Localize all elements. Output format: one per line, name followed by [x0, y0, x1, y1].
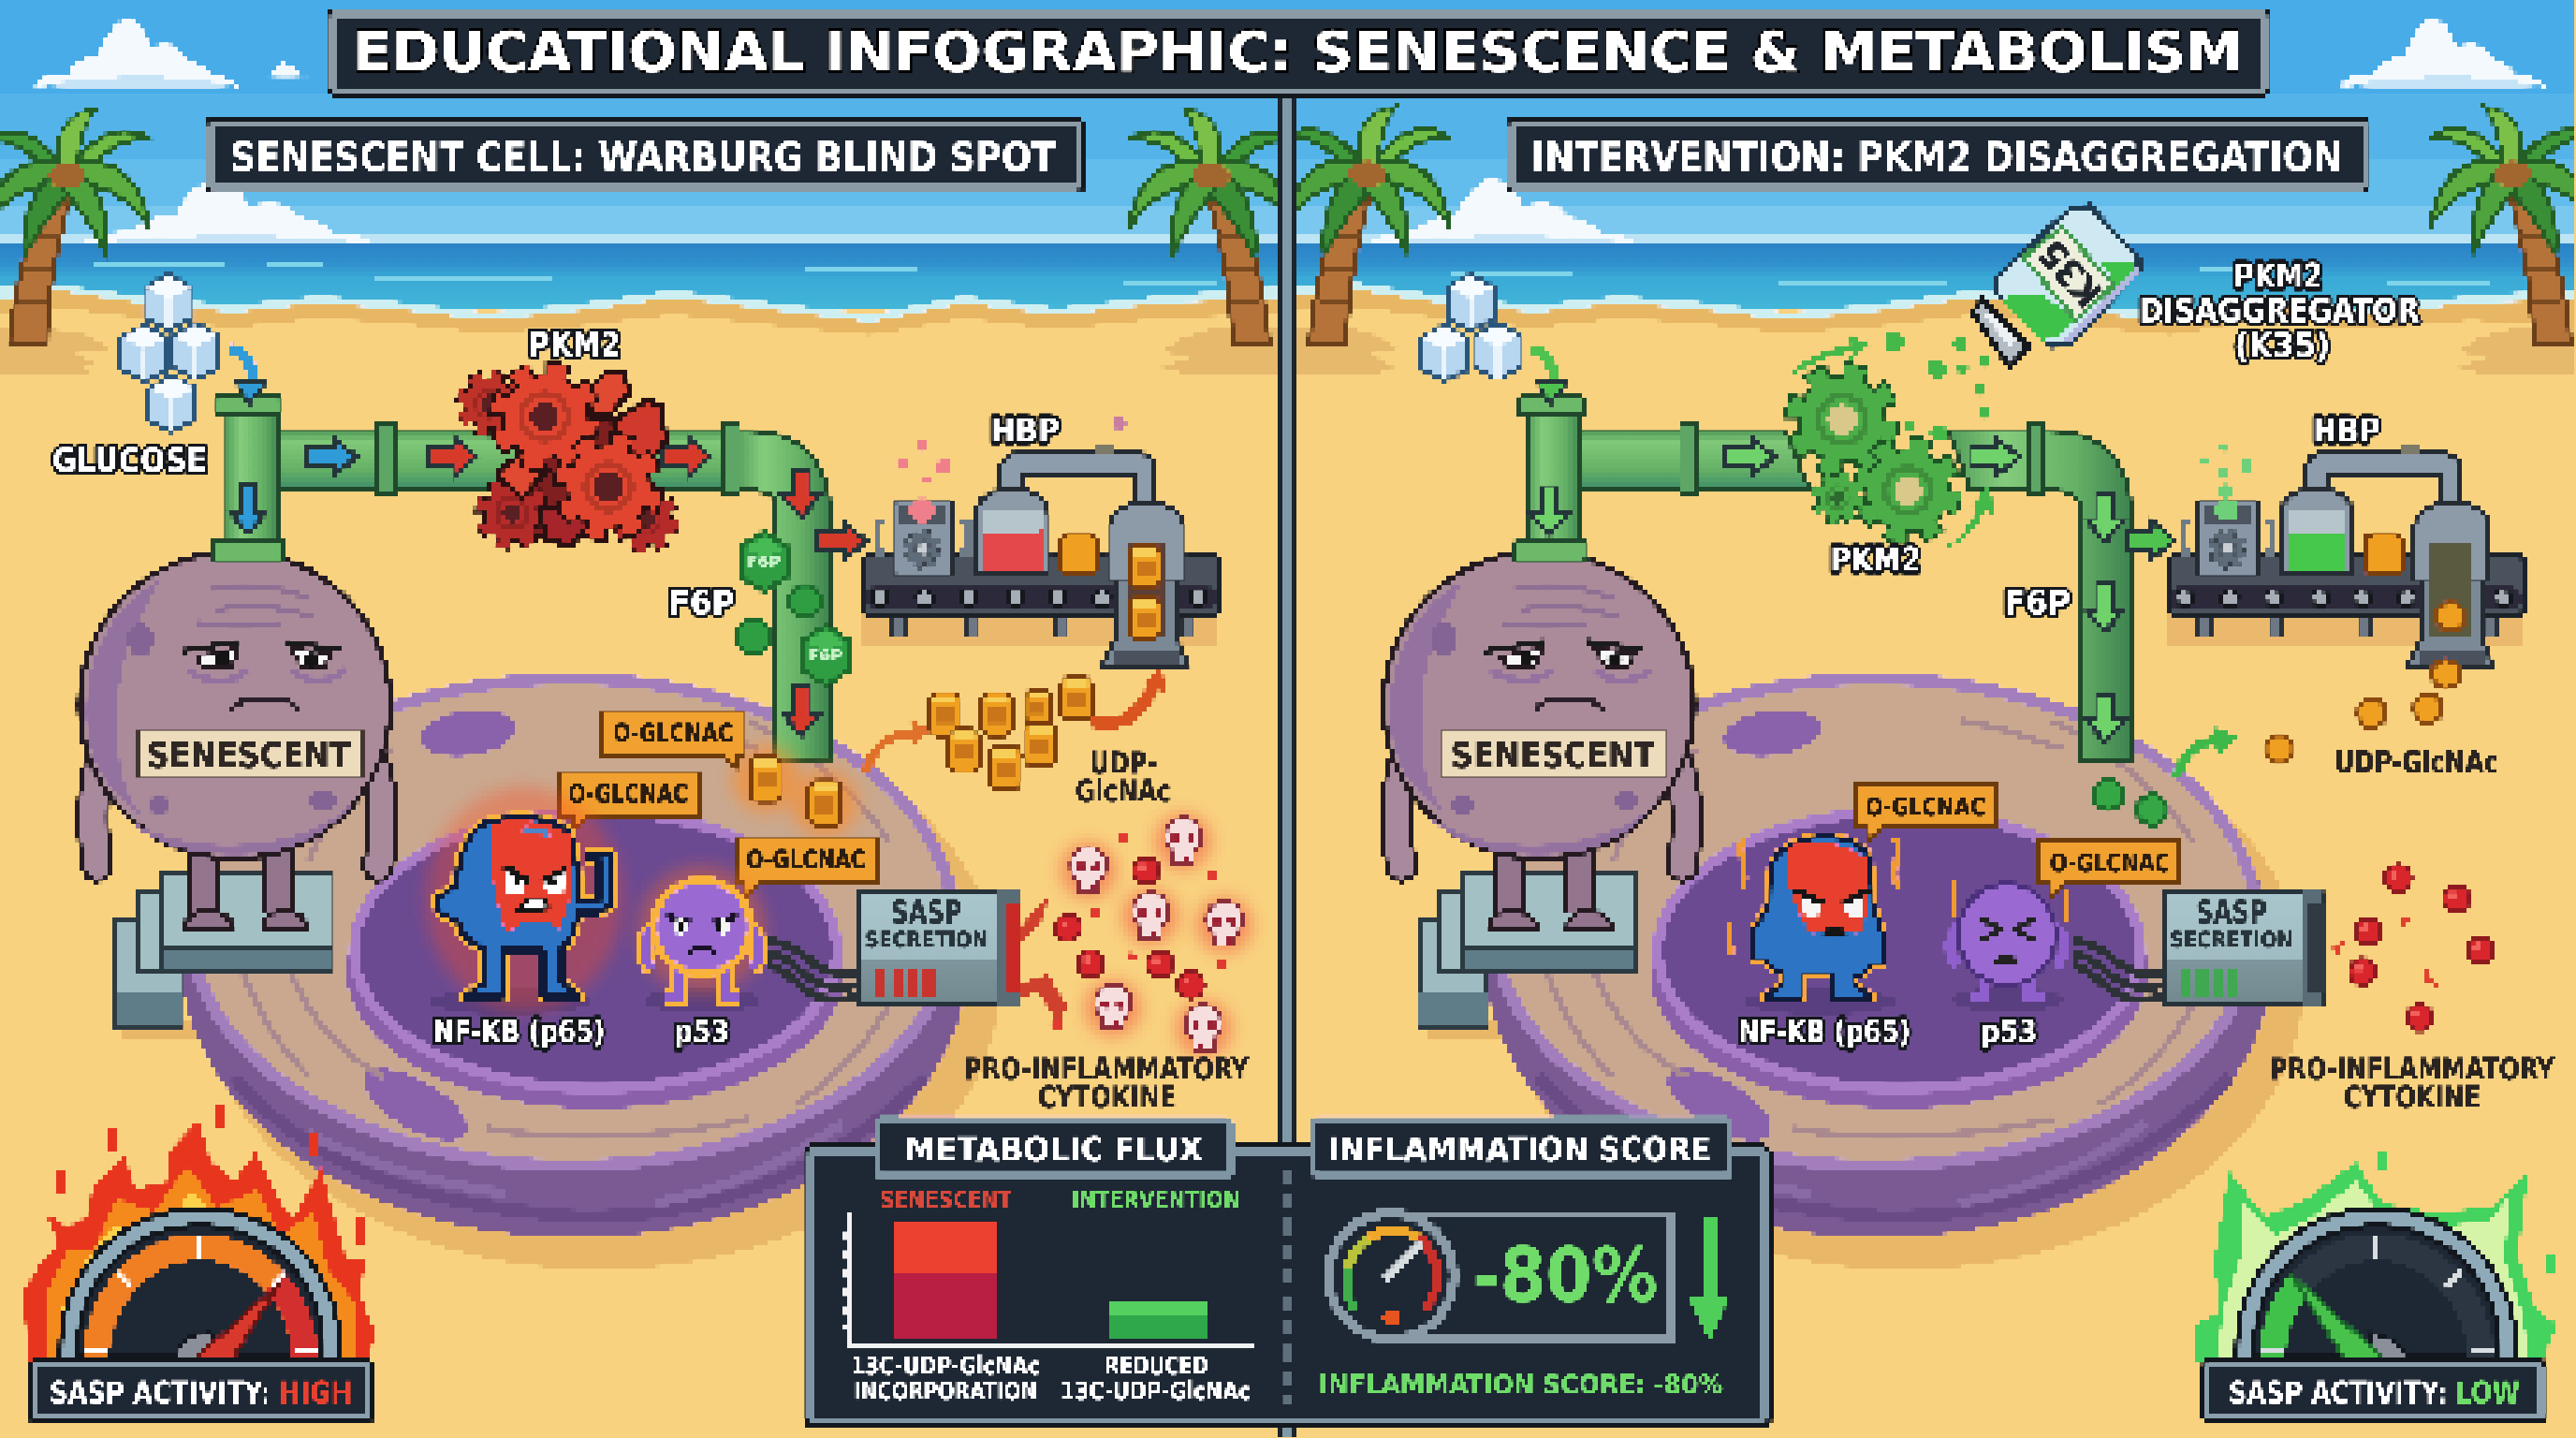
- outline: [437, 817, 611, 997]
- inflammation readout: [1328, 1213, 1730, 1341]
- furnace door: [2431, 543, 2470, 637]
- chart label left: 13C-UDP-GlcNAc: [851, 1352, 1040, 1381]
- cytokines left: [1020, 814, 1252, 1057]
- subtitle banner right: [1508, 120, 2368, 191]
- label: PKM2: PKM2: [529, 326, 621, 364]
- label: PKM2 disaggregator: DISAGGREGATOR: [2139, 292, 2420, 330]
- callout text 3: O-GLCNAC: [746, 845, 866, 874]
- palm tree left outer: [0, 109, 152, 345]
- label: senescent left: SENESCENT: [147, 735, 351, 776]
- background: sky: [0, 0, 2576, 247]
- bar chart: [841, 1214, 1256, 1344]
- tab title: metabolic flux: METABOLIC FLUX: [905, 1131, 1203, 1169]
- callouts right: [1855, 785, 2179, 897]
- arrow: furnace to jars: [1090, 679, 1156, 723]
- dial rim: [69, 1217, 331, 1363]
- dial band right: [2272, 1247, 2481, 1363]
- right gauge: SASP activity low: [2196, 1150, 2557, 1419]
- pipe right: [1515, 397, 2130, 762]
- label: SASP secretion left: SECRETION: [865, 927, 988, 953]
- dial right: [2246, 1217, 2508, 1363]
- palm tree left inner: [1127, 109, 1295, 345]
- label: SASP activity low: SASP ACTIVITY: LOW: [2229, 1374, 2520, 1411]
- chart label left: INCORPORATION: [854, 1377, 1037, 1406]
- arrow head: [1142, 667, 1168, 695]
- label: PKM2 right: PKM2: [1830, 541, 1921, 580]
- character: p53 right: [1950, 880, 2067, 1012]
- label: SASP activity high: SASP ACTIVITY: HIGH: [50, 1374, 352, 1411]
- label: HBP right: HBP: [2313, 412, 2380, 450]
- SASP secretion left: [858, 891, 1020, 1005]
- background: clouds: [33, 19, 2545, 246]
- label: NF-KB right: NF-KB (p65): [1738, 1013, 1910, 1049]
- green liquid: [2287, 530, 2347, 569]
- left HBP machine: [863, 417, 1220, 668]
- callout text 2: O-GLCNAC: [568, 780, 688, 809]
- label: glucose: GLUCOSE: [52, 442, 207, 480]
- dial ticks right: [2259, 1234, 2495, 1350]
- F6P molecules: [737, 532, 849, 685]
- center divider: [1280, 84, 1297, 1438]
- label: SASP secretion right: SECRETION: [2170, 927, 2293, 953]
- chart legend: intervention: INTERVENTION: [1072, 1186, 1240, 1213]
- palm shadows: [0, 330, 2576, 374]
- F6P tag 1: F6P: [747, 553, 781, 572]
- label: PKM2 disaggregator: PKM2: [2233, 257, 2323, 296]
- smoke: [896, 441, 951, 522]
- cell left: [80, 551, 1000, 1269]
- F6P tag 2: F6P: [809, 647, 842, 666]
- body silhouette: [437, 817, 611, 997]
- bottle label K35: K35: [2031, 231, 2112, 315]
- icon: aggregated PKM2 gears: [462, 371, 673, 547]
- label: p53 left: p53: [674, 1013, 729, 1049]
- right HBP machine: [2168, 443, 2525, 763]
- character: NF-KB right: [1728, 837, 1898, 1015]
- label: SASP secretion left: SASP: [891, 894, 962, 932]
- label: SASP secretion right: SASP: [2196, 894, 2267, 932]
- left gauge: SASP activity high: [23, 1107, 374, 1419]
- chart label right: REDUCED: [1105, 1352, 1208, 1381]
- tab: inflammation score: [1313, 1120, 1730, 1176]
- icon: glucose cubes right: [1421, 274, 1521, 381]
- arrows in pipe: [229, 348, 867, 736]
- tab: metabolic flux: [877, 1120, 1231, 1176]
- icon: separated PKM2 gears: [1796, 374, 1952, 535]
- tab title: inflammation score: INFLAMMATION SCORE: [1328, 1131, 1711, 1169]
- dial: [69, 1217, 331, 1363]
- green aura: [2196, 1150, 2557, 1363]
- furnace door: [1126, 543, 1165, 637]
- pipe: [212, 397, 829, 762]
- needle: [174, 1283, 281, 1363]
- readout value: -80%: [1472, 1232, 1658, 1319]
- label plate: senescent left: [138, 730, 362, 777]
- green F6P dots: [2093, 780, 2167, 825]
- flames: [23, 1107, 374, 1363]
- label: UDP-GlcNAc: UDP-: [1090, 745, 1157, 781]
- arrow: jars into cell: [866, 719, 931, 772]
- palm tree right inner: [1283, 107, 1452, 343]
- chart legend: senescent: SENESCENT: [880, 1186, 1012, 1213]
- subtitle right: INTERVENTION: PKM2 DISAGGREGATION: [1531, 134, 2343, 182]
- panel: metabolic flux and inflammation score: [808, 1120, 1767, 1423]
- label: UDP-GlcNAc right: UDP-GlcNAc: [2334, 744, 2498, 780]
- label: cytokine left: PRO-INFLAMMATORY: [964, 1051, 1250, 1087]
- label: cytokine left: CYTOKINE: [1038, 1079, 1177, 1115]
- character: p53 left: [638, 866, 766, 1013]
- label: F6P: F6P: [668, 584, 735, 623]
- dashed separator: [1284, 1168, 1292, 1402]
- callout text right 1: O-GLCNAC: [1866, 793, 1985, 822]
- icon: glucose cubes: [121, 274, 219, 432]
- glowing jars: [732, 745, 858, 837]
- readout caption: INFLAMMATION SCORE: -80%: [1319, 1369, 1723, 1400]
- dial rim right: [2246, 1217, 2508, 1363]
- SASP secretion right: [2163, 891, 2324, 1005]
- green smoke: [2200, 443, 2253, 521]
- label panel right: [2206, 1363, 2543, 1419]
- chart label right: 13C-UDP-GlcNAc: [1061, 1377, 1251, 1406]
- label: senescent right: SENESCENT: [1451, 735, 1655, 776]
- label: F6P right: F6P: [2004, 584, 2071, 623]
- label: UDP-GlcNAc: GlcNAc: [1076, 773, 1171, 809]
- subtitle left: SENESCENT CELL: WARBURG BLIND SPOT: [230, 134, 1056, 182]
- character: NF-KB left: [426, 786, 622, 1015]
- disaggregator particles: [1789, 331, 1994, 550]
- right pipeline: [1421, 206, 2174, 762]
- wires right: [2072, 941, 2163, 1000]
- label: cytokine right: CYTOKINE: [2344, 1079, 2481, 1115]
- red liquid: [982, 530, 1042, 569]
- subtitle banner left: [207, 120, 1083, 191]
- callout text right 2: O-GLCNAC: [2050, 849, 2170, 878]
- arrow: green into cell: [2176, 726, 2238, 777]
- title banner: [329, 10, 2269, 95]
- background: sea: [0, 244, 2576, 319]
- face: [490, 820, 572, 933]
- cytokines right: [2331, 865, 2494, 1031]
- callout text 1: O-GLCNAC: [613, 719, 733, 748]
- dial band: [95, 1247, 305, 1363]
- label: NF-KB left: NF-KB (p65): [433, 1013, 605, 1049]
- UDP-GlcNAc jars left: [929, 677, 1091, 789]
- wires left: [768, 941, 858, 1000]
- label plate: senescent right: [1442, 730, 1666, 777]
- cell right: [1383, 551, 2304, 1269]
- label: HBP: HBP: [990, 412, 1060, 450]
- dial ticks: [82, 1234, 318, 1350]
- label panel: [33, 1363, 370, 1419]
- palm tree right outer: [2428, 107, 2576, 343]
- arrows right: [1530, 348, 2174, 742]
- label: p53 right: p53: [1981, 1013, 2037, 1049]
- bottle: K35 disaggregator: [1972, 206, 2139, 367]
- left pipeline: [121, 274, 867, 762]
- title: EDUCATIONAL INFOGRAPHIC: SENESCENCE & METABOLISM: [353, 20, 2243, 85]
- label: PKM2 disaggregator: (K35): [2234, 327, 2330, 365]
- jars and coins right: [2265, 603, 2465, 763]
- needle right: [2291, 1274, 2408, 1363]
- callouts left: [559, 712, 877, 897]
